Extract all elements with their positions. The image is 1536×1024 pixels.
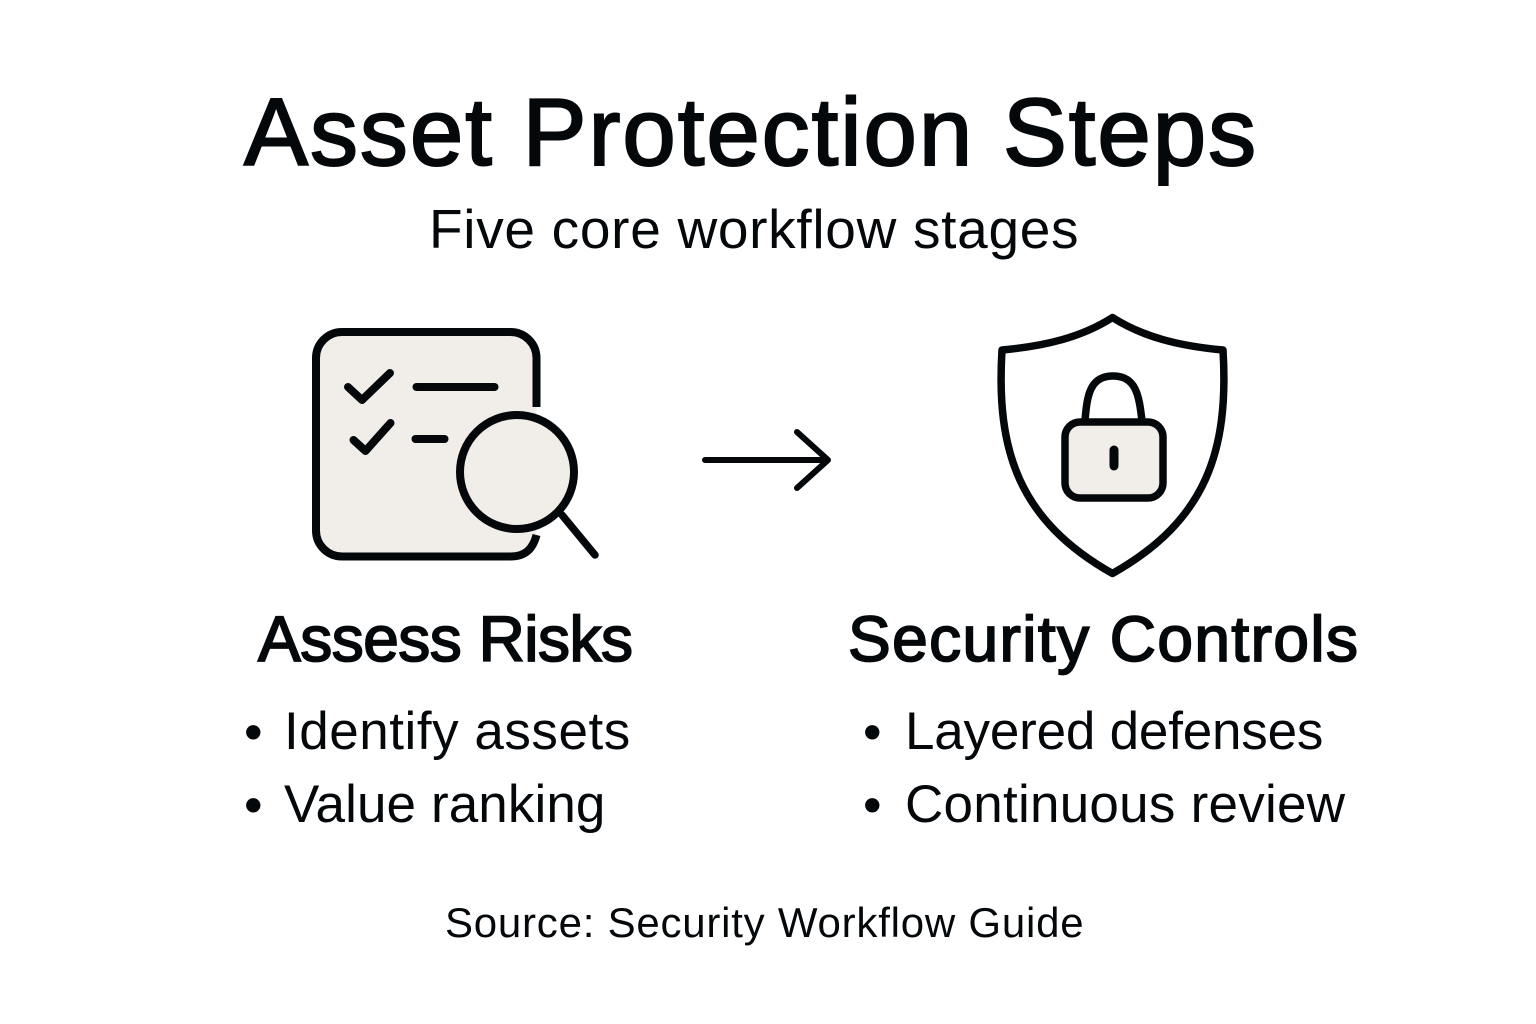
list: Security Controls bullets [863,702,1346,835]
heading: Assess Risks: Assess Risks [258,603,632,675]
list: Assess Risks bullets: • [244,703,263,762]
heading: Security Controls: Security Controls [848,603,1359,675]
title: Asset Protection Steps [244,79,1258,186]
arrow [702,429,831,491]
icon: shield with padlock [997,314,1228,578]
list: Assess Risks bullets: Value ranking [284,775,605,834]
list: Security Controls bullets: Continuous review [905,775,1345,834]
list: Assess Risks bullets: Identify assets [284,702,631,761]
list: Security Controls bullets: • [863,776,882,835]
source note: Source: Security Workflow Guide [445,899,1084,946]
list: Assess Risks bullets [244,702,631,835]
list: Security Controls bullets: Layered defenses [905,702,1323,761]
list: Security Controls bullets: • [863,703,882,762]
icon: checklist with magnifying glass [312,328,599,560]
list: Assess Risks bullets: • [244,776,263,835]
subtitle: Five core workflow stages [429,198,1079,260]
